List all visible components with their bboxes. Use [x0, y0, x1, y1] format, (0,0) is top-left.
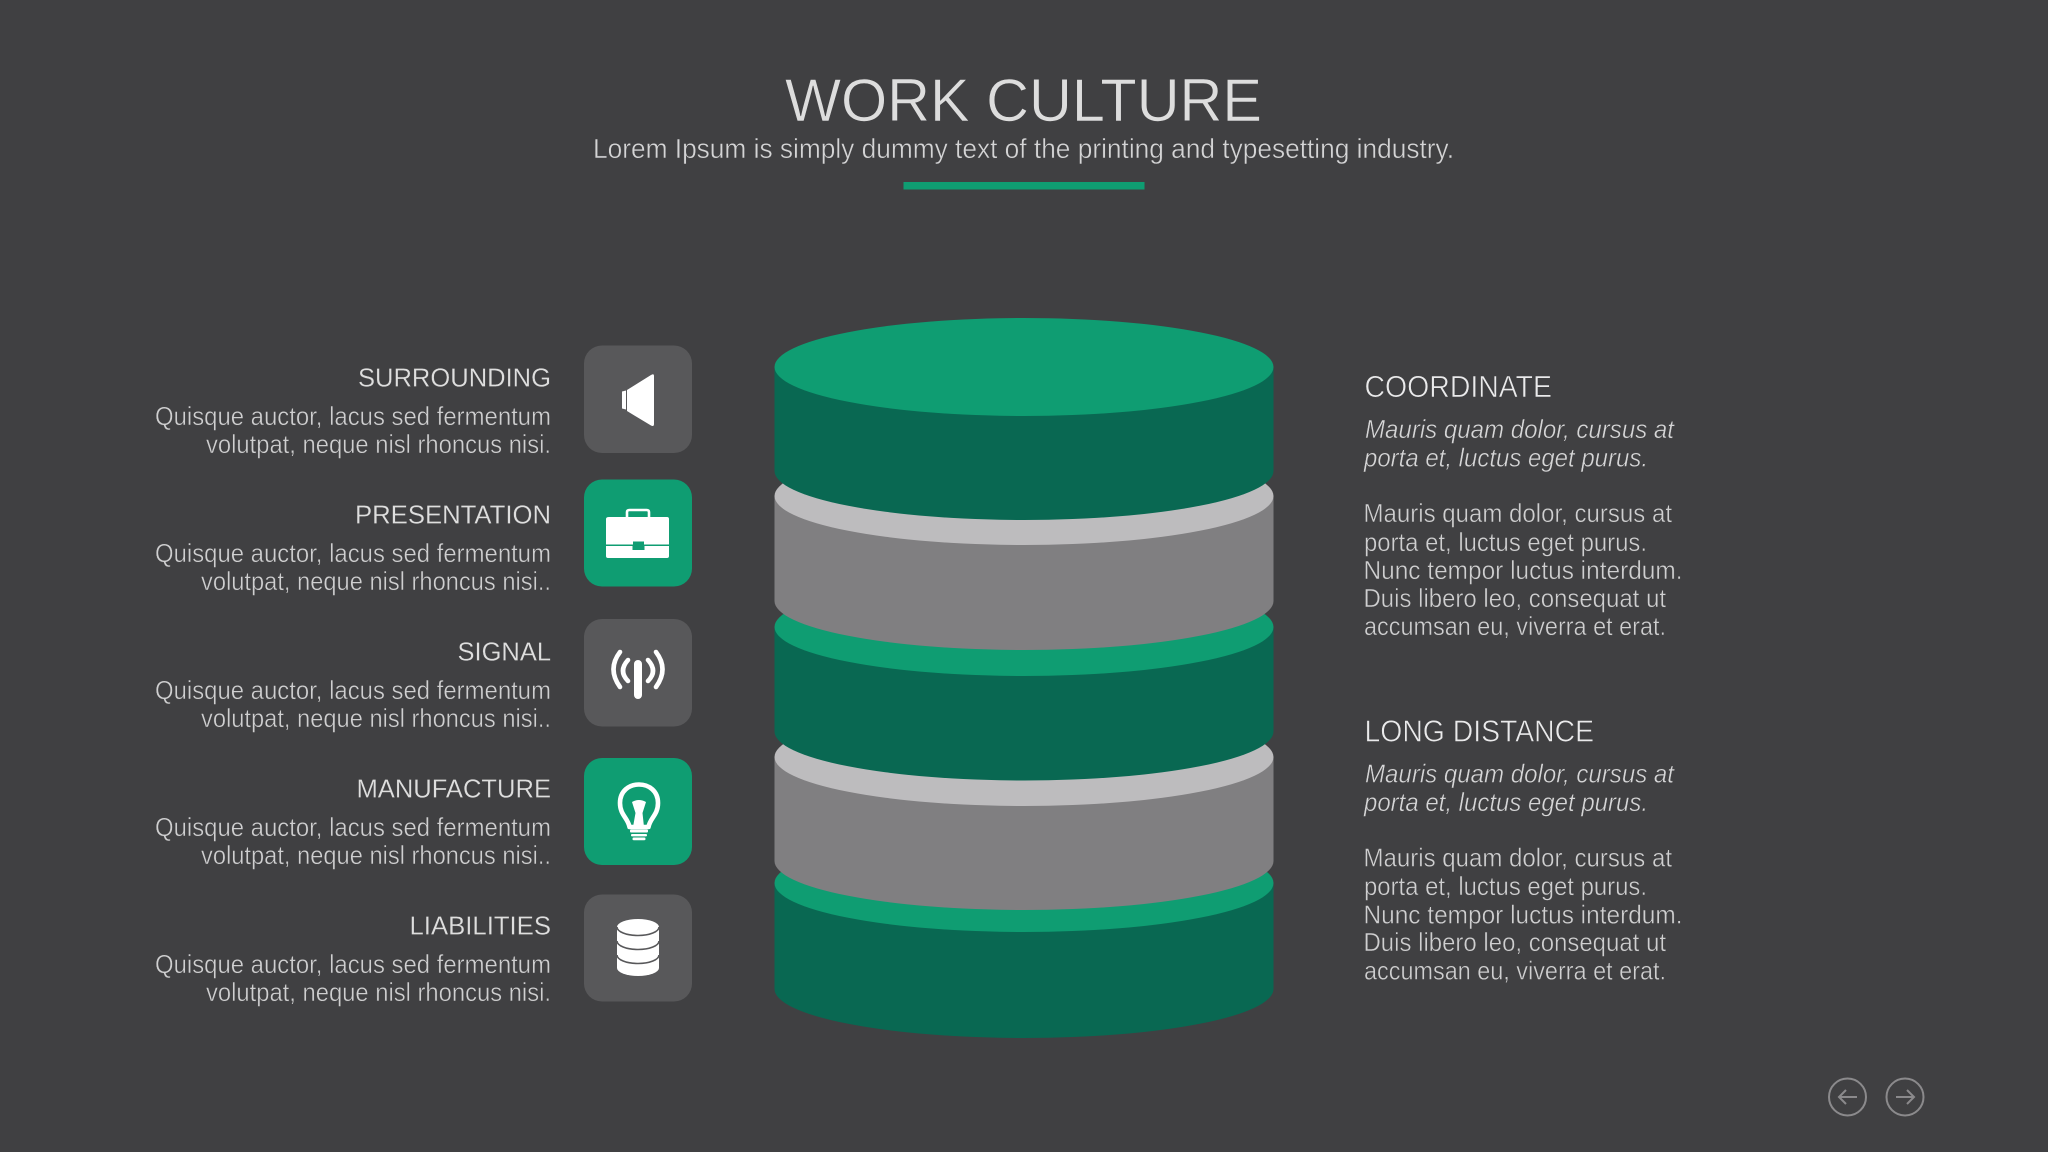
layer 1: green top [774, 318, 1274, 520]
item: presentation: Quisque auctor, lacus sed fermentum [155, 538, 551, 568]
layer 2: grey [774, 447, 1274, 650]
item: signal [155, 636, 551, 733]
body text: porta et, luctus eget purus. [1364, 527, 1647, 557]
body text: Duis libero leo, consequat ut [1364, 583, 1667, 613]
item: surrounding: SURROUNDING [358, 362, 551, 392]
title underline [904, 182, 1144, 190]
icon: light bulb [584, 758, 692, 865]
subtitle: Lorem Ipsum is simply dummy text of the printing and typesetting industry. [593, 133, 1454, 164]
item: presentation: volutpat, neque nisl rhoncus nisi.. [201, 566, 551, 596]
right text block: long distance [1363, 714, 1682, 986]
item: manufacture: MANUFACTURE [356, 774, 551, 804]
header [593, 67, 1454, 190]
body text: Mauris quam dolor, cursus at [1364, 842, 1673, 872]
item: manufacture: volutpat, neque nisl rhoncus nisi.. [201, 840, 551, 870]
item: presentation [155, 500, 551, 596]
item: surrounding: Quisque auctor, lacus sed fermentum [155, 401, 551, 431]
item: liabilities: volutpat, neque nisl rhoncus nisi. [206, 977, 551, 1007]
item: manufacture: Quisque auctor, lacus sed fermentum [155, 812, 551, 842]
item: liabilities: LIABILITIES [410, 910, 551, 940]
heading: LONG DISTANCE [1364, 714, 1594, 748]
item: surrounding: volutpat, neque nisl rhoncus nisi. [206, 429, 551, 459]
icon: previous arrow [1829, 1078, 1866, 1116]
item: liabilities [155, 910, 551, 1007]
icon: briefcase [584, 480, 692, 586]
italic summary: Mauris quam dolor, cursus at [1365, 758, 1676, 788]
italic summary: Mauris quam dolor, cursus at [1365, 414, 1676, 444]
icon: next arrow [1886, 1078, 1924, 1116]
body text: Duis libero leo, consequat ut [1364, 927, 1667, 957]
icon: database [584, 894, 692, 1002]
body text: accumsan eu, viverra et erat. [1364, 611, 1666, 641]
body text: Nunc tempor luctus interdum. [1364, 900, 1682, 930]
right text block: coordinate [1363, 369, 1682, 641]
body text: porta et, luctus eget purus. [1364, 871, 1647, 901]
italic summary: porta et, luctus eget purus. [1363, 787, 1648, 817]
body text [1364, 498, 1682, 641]
layer 3: green [774, 578, 1274, 780]
item: signal: SIGNAL [458, 636, 551, 666]
heading: COORDINATE [1364, 369, 1552, 404]
italic summary: porta et, luctus eget purus. [1363, 442, 1648, 472]
layer 4: grey [774, 708, 1274, 910]
body text: Mauris quam dolor, cursus at [1364, 498, 1673, 528]
item: presentation: PRESENTATION [355, 500, 551, 530]
stacked cylinder chart [774, 318, 1274, 1038]
item: surrounding [155, 362, 551, 459]
layer 5: green base [774, 834, 1274, 1038]
item: signal: Quisque auctor, lacus sed fermentum [155, 675, 551, 705]
italic summary [1363, 414, 1676, 472]
icon: antenna signal [584, 619, 692, 726]
body text: accumsan eu, viverra et erat. [1364, 956, 1666, 986]
body text [1364, 842, 1682, 986]
icon: speaker [584, 346, 692, 453]
item: manufacture [155, 774, 551, 870]
body text: Nunc tempor luctus interdum. [1364, 555, 1682, 585]
left list [155, 362, 551, 1007]
item: signal: volutpat, neque nisl rhoncus nisi.. [201, 703, 551, 733]
title: WORK CULTURE [785, 67, 1262, 134]
italic summary [1363, 758, 1676, 817]
item: liabilities: Quisque auctor, lacus sed fermentum [155, 949, 551, 979]
